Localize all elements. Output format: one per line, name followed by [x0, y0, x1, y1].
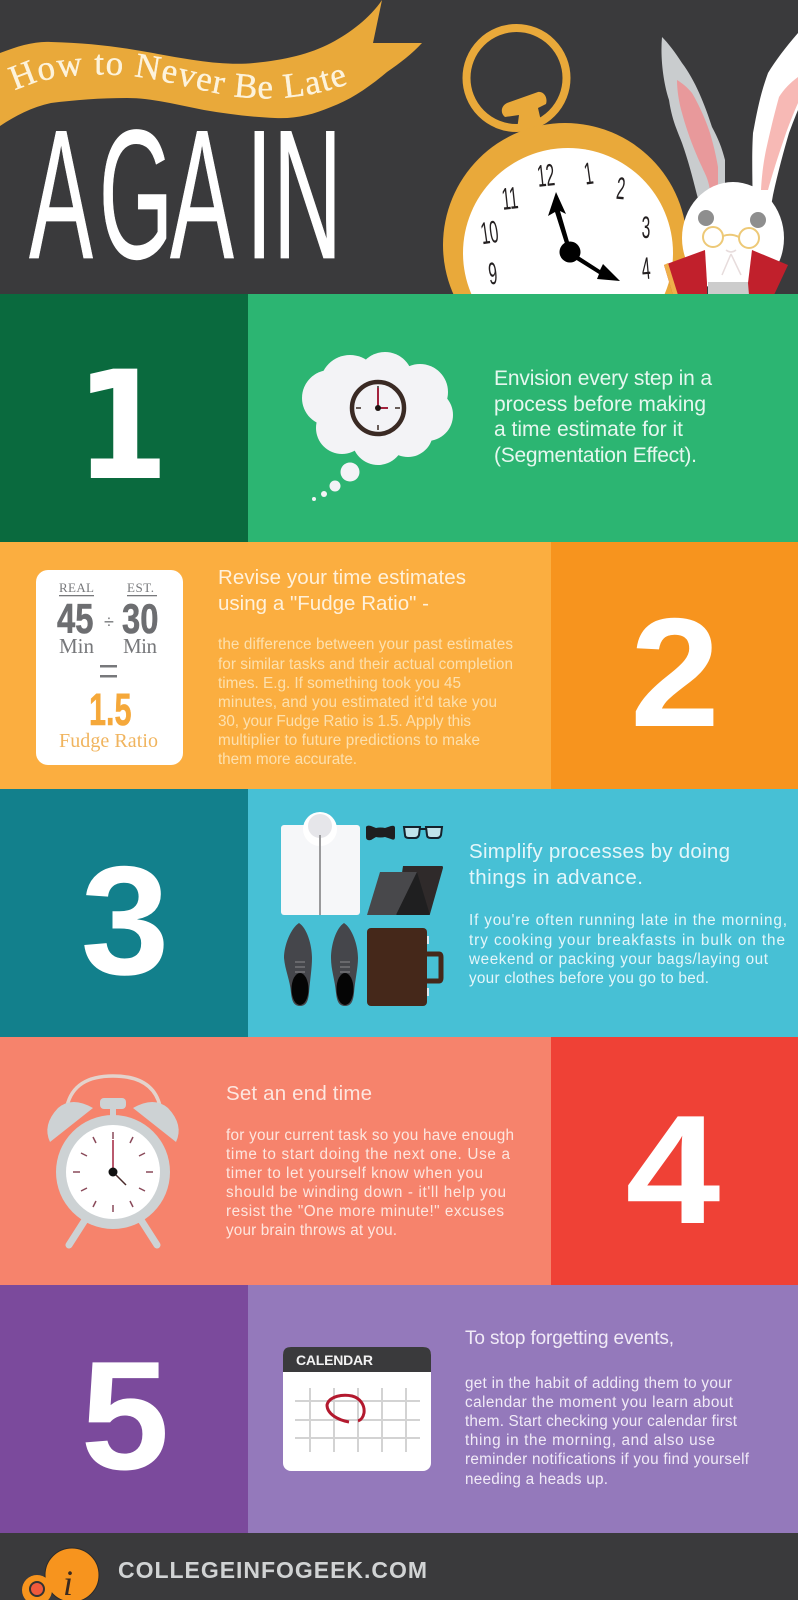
step 2 text	[218, 566, 513, 768]
title AGAIN: AGAIN	[29, 92, 342, 298]
step 1 text: process before making	[494, 393, 706, 416]
step 5 text: calendar the moment you learn about	[465, 1394, 734, 1411]
step 5 text	[465, 1328, 750, 1488]
step 2 text: Revise your time estimates	[218, 566, 466, 589]
clock numerals: 10	[479, 215, 501, 252]
pocket watch illustration	[443, 28, 687, 367]
step 3 text: Simplify processes by doing	[469, 840, 730, 863]
step 5 text: them. Start checking your calendar first	[465, 1413, 738, 1430]
fudge ratio card: Fudge Ratio	[59, 730, 158, 752]
step 2 text: minutes, and you estimated it'd take you	[218, 694, 497, 711]
icon: shirt	[281, 812, 360, 915]
fudge ratio card: 1.5	[89, 685, 132, 736]
header panel	[0, 0, 798, 298]
fudge ratio card: ÷	[104, 612, 114, 632]
step 3 text: things in advance.	[469, 866, 643, 889]
fudge ratio card: REAL	[59, 580, 94, 595]
step 4 text: Set an end time	[226, 1082, 372, 1105]
icon: briefcase	[367, 928, 441, 1006]
clock numerals: 11	[500, 182, 520, 217]
fudge ratio card: 45	[57, 595, 93, 642]
step 2 text: using a "Fudge Ratio" -	[218, 592, 429, 615]
step 5 text: needing a heads up.	[465, 1471, 608, 1488]
number 5: 5	[81, 1330, 169, 1502]
step 4 text: timer to let yourself know when you	[226, 1165, 483, 1182]
step 4 text: your brain throws at you.	[226, 1222, 397, 1239]
step 3 text: weekend or packing your bags/laying out	[468, 951, 769, 968]
clock numerals: 3	[642, 211, 650, 246]
step 2 text: the difference between your past estimates	[218, 636, 513, 653]
icon: tablet	[367, 866, 443, 915]
icon: calendar	[283, 1347, 431, 1471]
icon: glasses	[404, 827, 442, 838]
step 4 text	[226, 1082, 514, 1239]
fudge ratio card: Min	[123, 634, 158, 658]
clock numerals: 1	[582, 157, 595, 192]
panel: step 5	[0, 1285, 798, 1533]
footer panel	[0, 1533, 798, 1600]
step 3 text	[468, 840, 787, 987]
fudge ratio card: EST.	[127, 580, 154, 595]
clock numerals: 9	[487, 257, 499, 292]
fudge ratio card	[36, 570, 183, 765]
step 2 text: them more accurate.	[218, 751, 357, 768]
fudge ratio card: Min	[59, 634, 94, 658]
rabbit illustration	[661, 33, 798, 295]
step 4 text: for your current task so you have enough	[226, 1127, 514, 1144]
number 2: 2	[630, 586, 720, 759]
website url: COLLEGEINFOGEEK.COM	[118, 1557, 427, 1583]
step 2 text: times. E.g. If something took you 45	[218, 675, 461, 692]
step 3 text: your clothes before you go to bed.	[469, 970, 709, 987]
clock numerals: 12	[536, 159, 556, 194]
banner ribbon	[0, 0, 422, 126]
step 4 text: resist the "One more minute!" excuses	[226, 1203, 504, 1220]
panel: step 1	[0, 294, 798, 542]
step 4 text: time to start doing the next one. Use a	[226, 1146, 510, 1163]
step 2 text: 30, your Fudge Ratio is 1.5. Apply this	[218, 713, 471, 730]
panel: step 4	[0, 1037, 798, 1285]
number 3: 3	[81, 835, 169, 1007]
step 5 text: get in the habit of adding them to your	[465, 1375, 732, 1392]
glasses	[703, 227, 759, 248]
icon: bow tie	[366, 826, 395, 840]
step 5 text: thing in the morning, and also use	[465, 1432, 715, 1449]
clock numerals: 4	[640, 252, 652, 287]
step 5 text: reminder notifications if you find yourself	[465, 1451, 750, 1468]
icon: shoes	[284, 923, 358, 1006]
step 3 text: If you're often running late in the morning,	[469, 912, 787, 929]
clock numerals: 2	[615, 172, 627, 207]
step 1 text: a time estimate for it	[494, 418, 683, 441]
step 3 text: try cooking your breakfasts in bulk on the	[469, 932, 785, 949]
step 1 text: Envision every step in a	[494, 367, 712, 390]
panel: step 2	[0, 542, 798, 789]
number 1: 1	[75, 339, 169, 514]
clock numerals	[479, 157, 652, 292]
panel: step 3	[0, 789, 798, 1037]
step 1 text	[494, 367, 712, 467]
step 4 text: should be winding down - it'll help you	[226, 1184, 506, 1201]
step 5 text: To stop forgetting events,	[465, 1328, 674, 1349]
clock hands	[548, 192, 620, 281]
icon: calendar: CALENDAR	[296, 1352, 373, 1368]
number 4: 4	[626, 1083, 720, 1256]
icon: thought cloud with clock	[302, 352, 453, 501]
step 1 text: (Segmentation Effect).	[494, 444, 697, 467]
icon: alarm clock	[47, 1076, 179, 1245]
logo	[22, 1548, 99, 1600]
fudge ratio card: 30	[122, 595, 158, 642]
step 2 text: for similar tasks and their actual completion	[218, 656, 513, 673]
step 2 text: multiplier to future predictions to make	[218, 732, 480, 749]
banner title: How to Never Be Late	[7, 54, 347, 99]
